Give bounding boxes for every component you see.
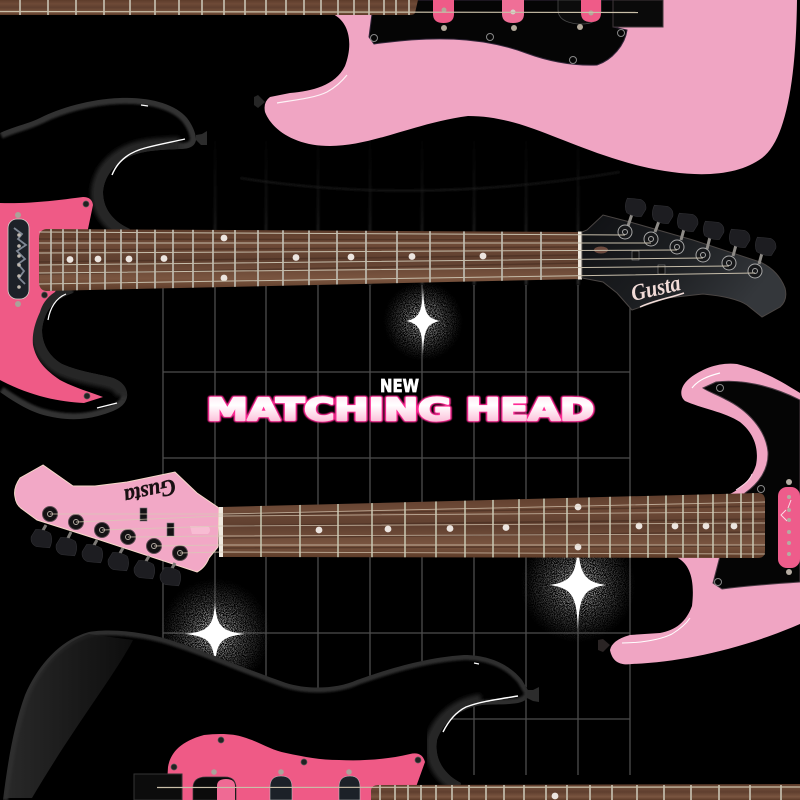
guitar: black body left — [0, 90, 786, 430]
pickup — [8, 212, 29, 307]
pickguard: pink — [166, 734, 425, 800]
body reflection — [5, 634, 133, 798]
sparkle: lower left — [159, 578, 271, 690]
label: new: NEW — [380, 376, 419, 397]
guitar: black body bottom — [0, 625, 800, 800]
guitar: pink body right — [598, 364, 800, 664]
gloss highlight — [277, 75, 347, 103]
pickguard: black — [369, 0, 627, 65]
strap button — [527, 687, 539, 702]
tuner posts — [42, 506, 188, 560]
tuner posts — [618, 225, 762, 278]
pickguard: pink — [0, 197, 103, 403]
strings — [50, 502, 765, 554]
string trees and truss cover — [140, 508, 147, 521]
body: pink — [610, 364, 800, 664]
pickguard: black — [703, 381, 800, 589]
title block — [207, 376, 594, 428]
body: black with soft rim — [0, 625, 540, 800]
strap button — [254, 95, 265, 108]
pickguard screws — [171, 737, 421, 770]
bridge — [134, 774, 182, 800]
body: black with soft rim — [0, 98, 196, 420]
pickguard screws — [714, 384, 764, 586]
pickguard screws — [370, 30, 624, 64]
sparkle: top centre — [383, 281, 463, 361]
headstock: pink — [15, 465, 765, 589]
fretboard — [0, 0, 638, 15]
logo: Gusta — [122, 474, 178, 509]
fretboard — [39, 229, 582, 291]
tuner knobs — [29, 525, 183, 589]
gloss highlights — [112, 139, 185, 175]
pickup — [778, 479, 800, 575]
heading: MATCHING HEAD — [207, 393, 594, 428]
pickups — [433, 0, 601, 31]
bridge — [613, 0, 663, 27]
background grid — [163, 130, 630, 775]
gloss highlights — [692, 373, 720, 388]
fretboard — [222, 490, 765, 560]
strap button — [598, 639, 610, 652]
tuner knobs — [623, 195, 778, 264]
guitar: pink body top right — [0, 0, 797, 174]
gloss highlights — [443, 696, 518, 732]
logo: Gusta — [629, 270, 683, 306]
strings — [39, 232, 755, 284]
sparkle: lower right — [520, 527, 636, 643]
headstock: black — [39, 195, 786, 317]
heading: MATCHING HEAD — [207, 393, 594, 428]
pickups — [193, 769, 360, 800]
pickguard screws — [42, 201, 90, 399]
string tree and truss cover — [594, 246, 608, 254]
strap button — [196, 131, 207, 145]
guitar: pink headstock neck — [15, 465, 765, 589]
body: pink — [265, 0, 797, 174]
fretboard — [157, 784, 800, 800]
